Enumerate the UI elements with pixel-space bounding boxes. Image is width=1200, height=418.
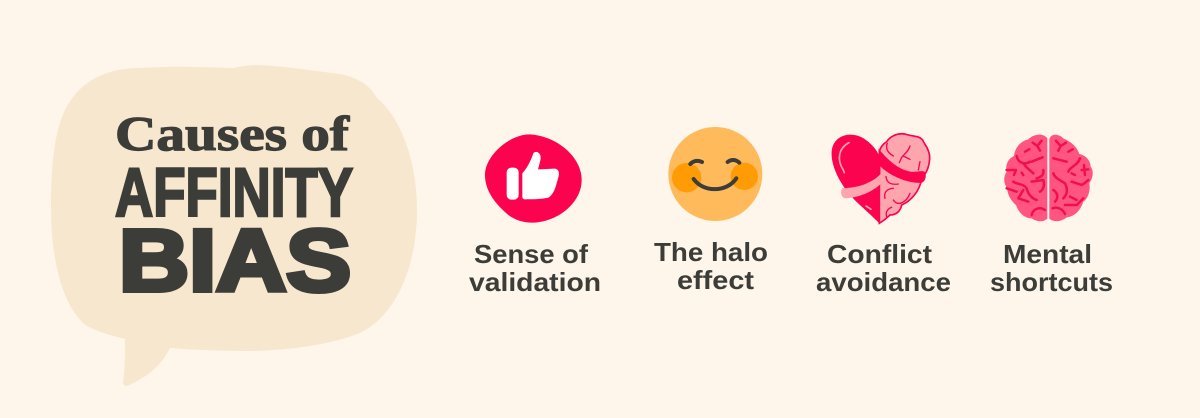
label: conflict avoidance: avoidance xyxy=(816,267,951,297)
label: sense of validation xyxy=(469,239,601,297)
label: conflict avoidance: Conflict xyxy=(827,239,932,269)
label: the halo effect xyxy=(654,237,768,295)
label: sense of validation: validation xyxy=(469,267,601,297)
label: the halo effect: The halo xyxy=(654,237,768,267)
title: BIAS xyxy=(119,212,351,310)
title: Causes of xyxy=(115,106,350,161)
icon: thumbs up xyxy=(485,134,582,223)
label: the halo effect: effect xyxy=(677,265,754,295)
icon: brain xyxy=(1004,135,1093,221)
speech bubble xyxy=(51,65,417,386)
label: mental shortcuts: shortcuts xyxy=(990,267,1113,297)
title: AFFINITY xyxy=(115,154,353,231)
label: mental shortcuts xyxy=(990,239,1113,297)
label: conflict avoidance xyxy=(816,239,951,297)
label: mental shortcuts: Mental xyxy=(1003,239,1092,269)
title xyxy=(115,106,353,310)
icon: heart hugging brain xyxy=(832,134,930,223)
icon: smiley face xyxy=(668,127,762,221)
label: sense of validation: Sense of xyxy=(474,239,588,269)
